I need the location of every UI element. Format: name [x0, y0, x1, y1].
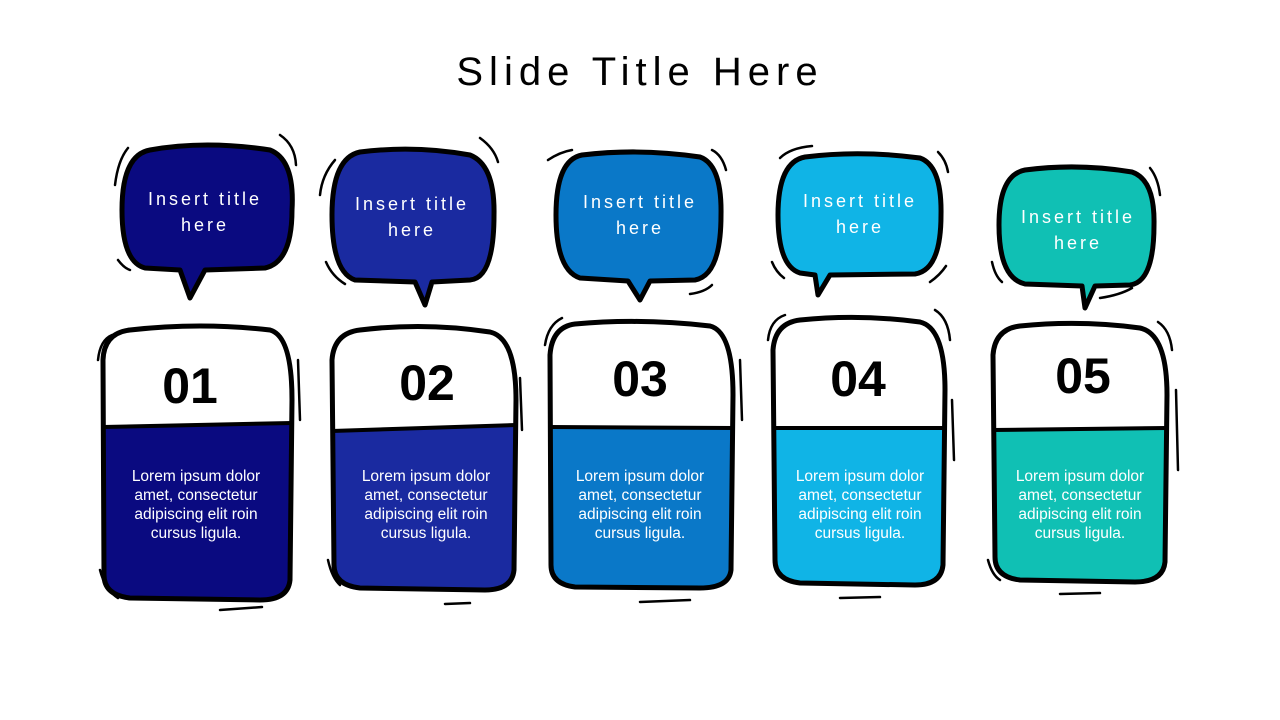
card 1: adipiscing elit roin — [134, 506, 258, 523]
card 1: Lorem ipsum dolor — [132, 468, 260, 485]
bubble 1: here — [181, 215, 229, 235]
card 2: Lorem ipsum dolor — [362, 468, 490, 485]
card 5: amet, consectetur — [1018, 487, 1142, 504]
card 1 — [98, 326, 300, 610]
card 3: adipiscing elit roin — [578, 506, 702, 523]
bubble 3: Insert title — [583, 192, 697, 212]
card 2: 02 — [399, 355, 455, 411]
card 5 — [988, 322, 1178, 594]
bubble 5 — [992, 167, 1160, 308]
card 2: amet, consectetur — [364, 487, 488, 504]
card 1: amet, consectetur — [134, 487, 258, 504]
card 3: amet, consectetur — [578, 487, 702, 504]
card 2 — [328, 326, 522, 604]
bubble 5: here — [1054, 233, 1102, 253]
card 1: 01 — [162, 358, 218, 414]
card 2: adipiscing elit roin — [364, 506, 488, 523]
bubble 3: here — [616, 218, 664, 238]
card 4: Lorem ipsum dolor — [796, 468, 924, 485]
card 5: Lorem ipsum dolor — [1016, 468, 1144, 485]
card 5: cursus ligula. — [1035, 525, 1125, 542]
bubble 2 — [320, 138, 498, 305]
card 4: amet, consectetur — [798, 487, 922, 504]
card 2: cursus ligula. — [381, 525, 471, 542]
bubble 3 — [548, 150, 726, 300]
card 3 — [545, 318, 742, 602]
card 3: cursus ligula. — [595, 525, 685, 542]
card 4: 04 — [830, 351, 886, 407]
bubble 4: here — [836, 217, 884, 237]
title: Slide Title Here — [456, 50, 824, 94]
bubble 1 — [115, 135, 296, 298]
card 5: 05 — [1055, 348, 1111, 404]
bubble 5: Insert title — [1021, 207, 1135, 227]
bubble 4: Insert title — [803, 191, 917, 211]
card 3: Lorem ipsum dolor — [576, 468, 704, 485]
card 3: 03 — [612, 351, 668, 407]
card 4: adipiscing elit roin — [798, 506, 922, 523]
bubble 4 — [772, 146, 948, 295]
bubble 2: here — [388, 220, 436, 240]
card 4: cursus ligula. — [815, 525, 905, 542]
bubble 2: Insert title — [355, 194, 469, 214]
bubble 1: Insert title — [148, 189, 262, 209]
card 4 — [768, 310, 954, 598]
card 5: adipiscing elit roin — [1018, 506, 1142, 523]
card 1: cursus ligula. — [151, 525, 241, 542]
